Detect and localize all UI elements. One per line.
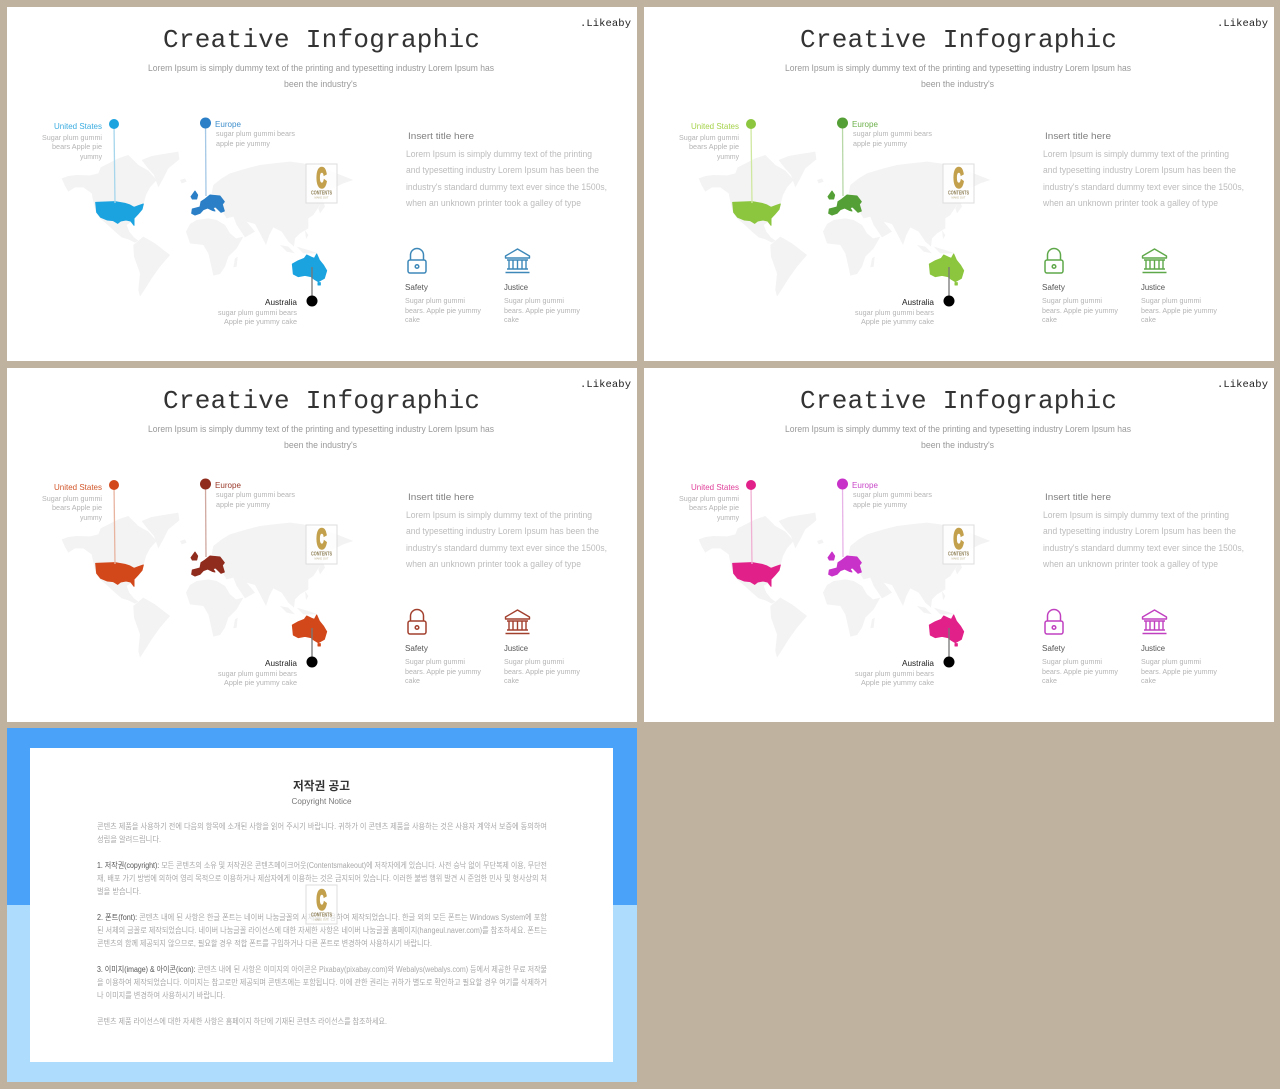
safety item: cake <box>405 315 420 324</box>
title: Creative Infographic <box>163 25 480 55</box>
United States marker: bears Apple pie <box>689 142 739 151</box>
Australia marker: sugar plum gummi bears <box>855 308 934 317</box>
panel: green slide <box>644 7 1274 361</box>
safety item: bears. Apple pie yummy <box>405 306 481 315</box>
Australia marker <box>855 615 964 687</box>
Europe marker <box>191 118 295 215</box>
logo stamp: CONTENTS <box>311 190 333 196</box>
logo stamp <box>306 163 337 203</box>
text block: and typesetting industry Lorem Ipsum has been the <box>406 165 599 175</box>
panel: pink slide <box>644 368 1274 722</box>
United States marker: bears Apple pie <box>52 142 102 151</box>
justice item: Sugar plum gummi <box>1141 657 1201 666</box>
subtitle <box>148 424 494 451</box>
safety item <box>405 248 481 324</box>
logo stamp: CONTENTS <box>311 912 333 918</box>
brand: .Likeaby <box>1217 379 1268 391</box>
justice item: bears. Apple pie yummy <box>504 667 580 676</box>
Australia marker <box>218 615 327 687</box>
safety item: Sugar plum gummi <box>405 296 465 305</box>
text block: Insert title here <box>1045 492 1111 503</box>
justice item: Justice <box>1141 283 1166 292</box>
Australia marker: sugar plum gummi bears <box>218 669 297 678</box>
logo stamp: MAKE OUT <box>952 556 966 560</box>
safety item <box>405 610 481 685</box>
title: Creative Infographic <box>163 386 480 416</box>
justice item <box>1141 249 1217 324</box>
United States marker: yummy <box>717 152 739 161</box>
logo stamp <box>943 163 974 203</box>
clause 2: font: 된 서체의 글꼴로 제작되었습니다. 네이버 나눔글꼴 라이선스에 대한 자세한 사항은 네이버 나눔글꼴 홈페이지(hangeul.naver.com)를 참조하세요. 폰트는 <box>97 925 547 935</box>
world map <box>62 513 353 658</box>
Europe marker: Europe <box>215 119 241 129</box>
justice item: Sugar plum gummi <box>504 657 564 666</box>
safety item <box>1042 610 1118 685</box>
justice item: cake <box>504 676 519 685</box>
clause 1: copyright: 재, 배포 가기 방법에 의하여 영리 목적으로 이용하거나 제삼자에게 이용하는 것은 금지되어 있습니다. 이러한 불법 행위 발견 시 준엄한 민사 및 형사상의 처 <box>97 873 547 883</box>
subtitle: Lorem Ipsum is simply dummy text of the printing and typesetting industry Lorem Ipsum has <box>148 63 494 74</box>
justice item <box>504 610 580 685</box>
United States marker: Sugar plum gummi <box>679 494 739 503</box>
safety item: Sugar plum gummi <box>405 657 465 666</box>
Australia marker: Apple pie yummy cake <box>224 678 297 687</box>
United States marker: yummy <box>80 513 102 522</box>
safety item: bears. Apple pie yummy <box>1042 306 1118 315</box>
logo stamp: C <box>317 524 326 554</box>
copyright subheading: Copyright Notice <box>292 797 352 806</box>
intro paragraph: 성립을 알려드립니다. <box>97 834 161 844</box>
clause 3: image and icon <box>97 964 547 1000</box>
United States marker: bears Apple pie <box>52 503 102 512</box>
logo stamp: MAKE OUT <box>314 918 329 922</box>
United States marker <box>42 119 143 225</box>
logo stamp: CONTENTS <box>948 552 970 558</box>
title: Creative Infographic <box>800 25 1117 55</box>
Australia marker: Australia <box>265 658 297 668</box>
Australia marker: Apple pie yummy cake <box>224 317 297 326</box>
text block: industry's standard dummy text ever since the 1500s, <box>406 543 607 553</box>
Australia marker: sugar plum gummi bears <box>855 669 934 678</box>
United States marker <box>679 480 780 586</box>
safety item: Sugar plum gummi <box>1042 657 1102 666</box>
closing note: 콘텐츠 제품 라이선스에 대한 자세한 사항은 홈페이지 하단에 기재된 콘텐츠 라이선스를 참조하세요. <box>97 1016 387 1026</box>
Australia marker: sugar plum gummi bears <box>218 308 297 317</box>
justice item: Justice <box>1141 644 1166 653</box>
text block: and typesetting industry Lorem Ipsum has been the <box>406 526 599 536</box>
clause 3: image and icon: 을 이용하여 제작되었습니다. 이미지는 참고로만 제공되며 콘텐츠에는 포함됩니다. 이에 관한 권리는 귀하가 별도로 확인하고 필요할 경우 여기를 삭제하거 <box>97 977 547 987</box>
United States marker: United States <box>54 121 102 131</box>
Europe marker: apple pie yummy <box>853 500 907 509</box>
text block <box>1042 492 1244 569</box>
world map <box>699 513 990 658</box>
safety item: cake <box>1042 315 1057 324</box>
panel: copyright notice <box>7 728 637 1082</box>
Australia marker: Australia <box>902 297 934 307</box>
copyright heading: 저작권 공고 <box>293 778 350 793</box>
brand: .Likeaby <box>1217 18 1268 30</box>
subtitle <box>785 424 1131 451</box>
clause 2: font: 콘텐츠의 함께 제공되지 않으므로, 필요할 경우 적합 폰트를 구입하거나 다른 폰트로 변경하여 사용하시기 바랍니다. <box>97 938 432 948</box>
safety item: bears. Apple pie yummy <box>1042 667 1118 676</box>
text block: when an unknown printer took a galley of type <box>1042 198 1218 208</box>
intro paragraph: 콘텐츠 제품을 사용하기 전에 다음의 항목에 소개된 사항을 읽어 주시기 바랍니다. 귀하가 이 콘텐츠 제품을 사용하는 것은 사용자 계약서 보증에 동의하여 <box>97 821 547 831</box>
intro paragraph <box>97 821 547 844</box>
logo stamp: MAKE OUT <box>952 196 966 200</box>
Australia marker: Australia <box>265 297 297 307</box>
safety item: Sugar plum gummi <box>1042 296 1102 305</box>
safety item: bears. Apple pie yummy <box>405 667 481 676</box>
justice item: bears. Apple pie yummy <box>1141 306 1217 315</box>
text block: Lorem Ipsum is simply dummy text of the printing <box>1043 149 1229 159</box>
justice item: Justice <box>504 644 529 653</box>
Australia marker: Apple pie yummy cake <box>861 317 934 326</box>
subtitle: been the industry's <box>921 79 994 90</box>
logo stamp: CONTENTS <box>948 190 970 196</box>
justice item <box>504 249 580 324</box>
Europe marker: sugar plum gummi bears <box>853 490 932 499</box>
Europe marker: Europe <box>852 480 878 490</box>
justice item: bears. Apple pie yummy <box>504 306 580 315</box>
logo stamp <box>306 885 337 924</box>
text block: and typesetting industry Lorem Ipsum has been the <box>1043 526 1236 536</box>
text block: Lorem Ipsum is simply dummy text of the printing <box>406 149 592 159</box>
clause 1: copyright: 벌을 받습니다. <box>97 886 141 896</box>
clause 3: image and icon: 3. 이미지(image) & 아이콘(icon): 콘텐츠 내에 된 사항은 이미지의 아이콘은 Pixabay(pixabay.com)와 Webalys(webalys.com) 등에서 제공한 무료 저작물 <box>97 964 547 974</box>
logo stamp: C <box>317 885 326 915</box>
United States marker: yummy <box>80 152 102 161</box>
text block: Insert title here <box>1045 131 1111 142</box>
safety item: Safety <box>405 644 428 653</box>
United States marker: Sugar plum gummi <box>679 133 739 142</box>
clause 1: copyright: 1. 저작권(copyright): 모든 콘텐츠의 소유 및 저작권은 콘텐츠메이크어웃(Contentsmakeout)에 저작자에게 있습니다. 사전 승낙 없이 무단복제 이용, 무단전 <box>97 860 547 870</box>
brand: .Likeaby <box>580 379 631 391</box>
text block <box>405 492 607 569</box>
panel: red slide <box>7 368 637 722</box>
logo stamp <box>943 524 974 564</box>
Europe marker: apple pie yummy <box>216 139 270 148</box>
safety item: Safety <box>405 283 428 292</box>
subtitle: Lorem Ipsum is simply dummy text of the printing and typesetting industry Lorem Ipsum has <box>785 63 1131 74</box>
safety item: cake <box>1042 676 1057 685</box>
logo stamp: C <box>954 524 963 554</box>
justice item: cake <box>1141 315 1156 324</box>
subtitle <box>785 63 1131 90</box>
world map <box>699 152 990 297</box>
United States marker <box>42 480 143 586</box>
safety item: Safety <box>1042 644 1065 653</box>
justice item: cake <box>504 315 519 324</box>
United States marker <box>679 119 780 225</box>
United States marker: United States <box>54 482 102 492</box>
panel: blue slide <box>7 7 637 361</box>
subtitle: been the industry's <box>284 440 357 451</box>
United States marker: yummy <box>717 513 739 522</box>
justice item: Justice <box>504 283 529 292</box>
United States marker: Sugar plum gummi <box>42 133 102 142</box>
clause 3: image and icon: 나 이미지를 변경하여 사용하시기 바랍니다. <box>97 990 225 1000</box>
text block: when an unknown printer took a galley of type <box>405 559 581 569</box>
Europe marker <box>191 478 295 576</box>
justice item: bears. Apple pie yummy <box>1141 667 1217 676</box>
logo stamp: C <box>954 163 963 193</box>
logo stamp: MAKE OUT <box>314 556 329 560</box>
safety item <box>1042 248 1118 324</box>
logo stamp: C <box>317 163 326 193</box>
safety item: cake <box>405 676 420 685</box>
Europe marker: apple pie yummy <box>216 500 270 509</box>
Australia marker: Apple pie yummy cake <box>861 678 934 687</box>
Europe marker: Europe <box>852 119 878 129</box>
text block: industry's standard dummy text ever since the 1500s, <box>1043 543 1244 553</box>
text block: when an unknown printer took a galley of type <box>405 198 581 208</box>
world map <box>62 152 353 297</box>
Australia marker <box>218 254 327 326</box>
text block: industry's standard dummy text ever since the 1500s, <box>1043 182 1244 192</box>
subtitle: been the industry's <box>284 79 357 90</box>
title: Creative Infographic <box>800 386 1117 416</box>
United States marker: Sugar plum gummi <box>42 494 102 503</box>
Australia marker: Australia <box>902 658 934 668</box>
justice item: cake <box>1141 676 1156 685</box>
text block: when an unknown printer took a galley of type <box>1042 559 1218 569</box>
text block: and typesetting industry Lorem Ipsum has been the <box>1043 165 1236 175</box>
United States marker: United States <box>691 482 739 492</box>
clause 1: copyright <box>97 860 547 896</box>
Europe marker: sugar plum gummi bears <box>853 129 932 138</box>
Australia marker <box>855 254 964 326</box>
justice item: Sugar plum gummi <box>504 296 564 305</box>
text block <box>405 131 607 208</box>
justice item <box>1141 610 1217 685</box>
brand: .Likeaby <box>580 18 631 30</box>
United States marker: bears Apple pie <box>689 503 739 512</box>
subtitle: been the industry's <box>921 440 994 451</box>
subtitle: Lorem Ipsum is simply dummy text of the printing and typesetting industry Lorem Ipsum has <box>148 424 494 435</box>
Europe marker: apple pie yummy <box>853 139 907 148</box>
United States marker: United States <box>691 121 739 131</box>
text block: Insert title here <box>408 492 474 503</box>
text block: industry's standard dummy text ever since the 1500s, <box>406 182 607 192</box>
clause 2: font <box>97 912 548 948</box>
text block: Lorem Ipsum is simply dummy text of the printing <box>406 510 592 520</box>
logo stamp: CONTENTS <box>311 552 333 558</box>
Europe marker <box>828 118 932 215</box>
Europe marker: sugar plum gummi bears <box>216 129 295 138</box>
justice item: Sugar plum gummi <box>1141 296 1201 305</box>
Europe marker: Europe <box>215 480 241 490</box>
clause 2: font: 2. 폰트(font): 콘텐츠 내에 된 사항은 한글 폰트는 네이버 나눔글꼴의 서체를 사용하여 제작되었습니다. 한글 외의 모든 폰트는 Windows System에 포함 <box>97 912 548 922</box>
text block: Lorem Ipsum is simply dummy text of the printing <box>1043 510 1229 520</box>
Europe marker: sugar plum gummi bears <box>216 490 295 499</box>
logo stamp <box>306 524 337 564</box>
safety item: Safety <box>1042 283 1065 292</box>
subtitle: Lorem Ipsum is simply dummy text of the printing and typesetting industry Lorem Ipsum has <box>785 424 1131 435</box>
text block: Insert title here <box>408 131 474 142</box>
Europe marker <box>828 478 932 576</box>
logo stamp: MAKE OUT <box>314 196 329 200</box>
text block <box>1042 131 1244 208</box>
subtitle <box>148 63 494 90</box>
